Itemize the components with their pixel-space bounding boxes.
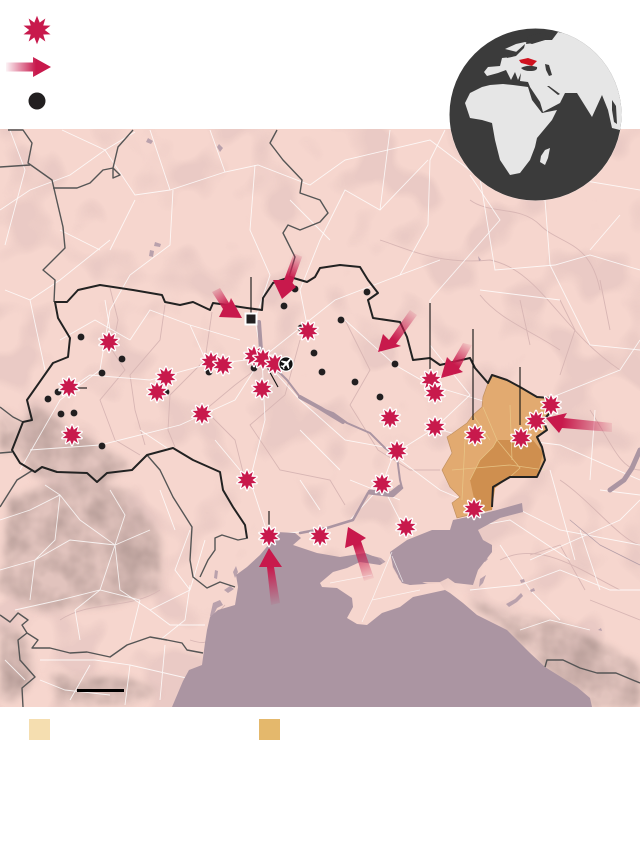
scale bar xyxy=(77,689,124,692)
Ukraine border xyxy=(12,265,550,538)
Crimea xyxy=(320,558,445,625)
legend swatch: dark xyxy=(259,719,280,740)
legend: attack arrow xyxy=(6,57,51,77)
map panel xyxy=(0,129,640,707)
icon: airport xyxy=(279,357,293,371)
Donbas internal lines xyxy=(452,405,545,500)
forest and terrain shading xyxy=(0,129,640,707)
globe: inland seas xyxy=(506,33,617,124)
arrow: Black Sea to Odesa xyxy=(259,548,282,605)
Sea of Azov xyxy=(390,503,523,585)
globe: Ukraine highlight xyxy=(519,58,537,66)
legend: strike marker xyxy=(23,16,51,44)
arrow: Kharkiv xyxy=(441,343,472,378)
occupied Donbas area xyxy=(470,440,543,512)
capital marker: Kyiv xyxy=(246,314,256,324)
legend swatch: light xyxy=(29,719,50,740)
Crimea roads xyxy=(330,552,420,622)
Black Sea xyxy=(172,532,592,707)
globe: Africa xyxy=(465,84,557,175)
neighbouring country borders xyxy=(0,130,640,707)
lakes and small water bodies xyxy=(146,138,602,631)
river Dnipro and reservoirs xyxy=(259,322,640,565)
legend: city dot xyxy=(28,92,46,110)
arrow: north-east xyxy=(378,310,417,352)
arrow: towards Kyiv xyxy=(212,288,242,318)
road network xyxy=(0,130,640,705)
arrow: from Crimea xyxy=(345,527,374,581)
arrow: east via Luhansk xyxy=(546,413,612,433)
strike markers xyxy=(59,321,561,546)
city dots xyxy=(44,286,398,450)
attack arrows xyxy=(212,253,612,605)
Donbas regions fill xyxy=(442,375,550,518)
globe: Madagascar xyxy=(540,148,550,165)
globe: Eurasia xyxy=(484,32,622,130)
arrow: north via Belarus xyxy=(273,253,302,299)
regional borders xyxy=(60,200,640,643)
locator globe xyxy=(449,28,622,201)
leader lines xyxy=(75,277,520,528)
